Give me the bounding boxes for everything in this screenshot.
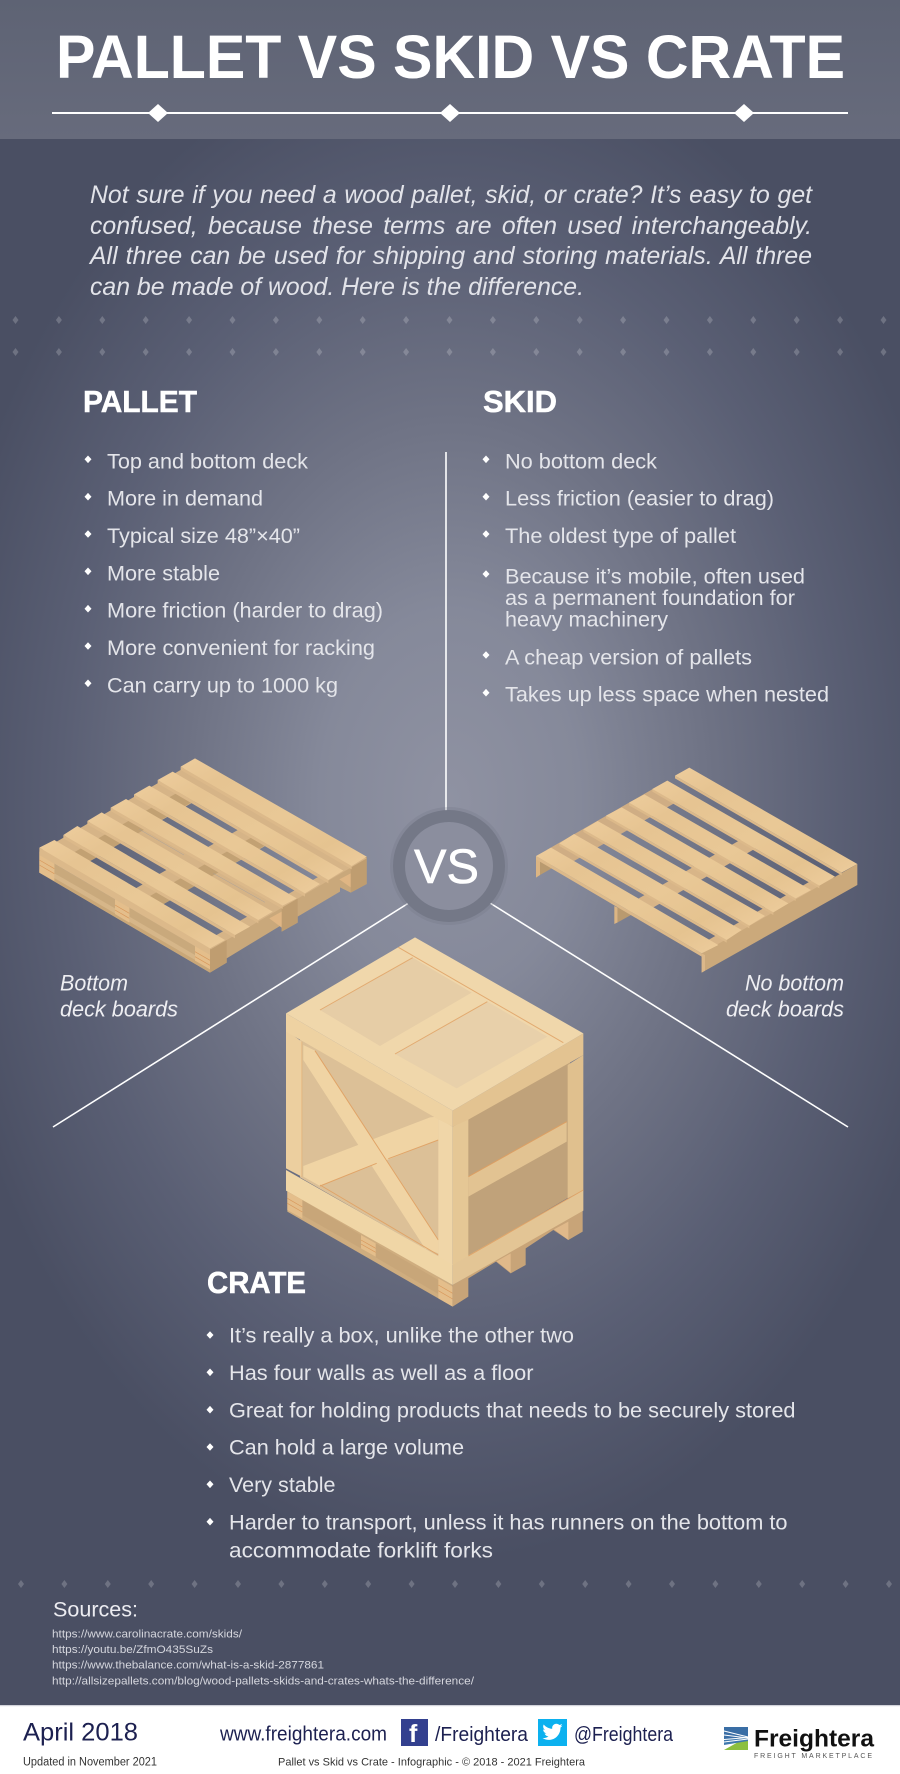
panel: pallet list: [83, 384, 383, 697]
panel: pallet list: Can carry up to 1000 kg: [107, 673, 338, 697]
icon: facebook: f: [409, 1720, 418, 1748]
logo: freightera: FREIGHT MARKETPLACE: [754, 1753, 874, 1760]
vs badge: VS: [414, 841, 479, 894]
panel: skid list: Less friction (easier to drag): [505, 487, 774, 511]
date: April 2018: [23, 1719, 138, 1747]
panel: pallet list: More friction (harder to drag): [107, 599, 383, 623]
footer: Updated in November 2021: [23, 1757, 157, 1769]
panel: pallet list: More in demand: [107, 487, 263, 511]
panel: crate list: [206, 1265, 796, 1562]
panel: pallet list: Top and bottom deck: [107, 449, 308, 473]
intro text: All three can be used for shipping and storing materials. All three: [88, 243, 812, 270]
intro text: Not sure if you need a wood pallet, skid, or crate? It’s easy to get: [90, 182, 813, 209]
caption: bottom deck boards: [60, 971, 178, 1022]
panel: pallet list: More convenient for racking: [107, 636, 375, 660]
panel: skid list: Takes up less space when nested: [505, 683, 829, 707]
caption: no bottom deck boards: No bottom: [745, 971, 844, 996]
footer: /Freightera: [435, 1724, 529, 1746]
footer: @Freightera: [574, 1724, 674, 1746]
caption: no bottom deck boards: [726, 971, 844, 1022]
header band: [0, 0, 900, 139]
sources: https://www.carolinacrate.com/skids/: [52, 1629, 243, 1641]
heading: crate: CRATE: [207, 1265, 306, 1300]
panel: skid list: [482, 384, 829, 707]
footer: [0, 1705, 900, 1774]
panel: crate list: Great for holding products that needs to be securely stored: [229, 1398, 796, 1422]
logo: freightera: [724, 1726, 875, 1760]
panel: crate list: accommodate forklift forks: [229, 1538, 493, 1562]
heading: pallet: PALLET: [83, 384, 197, 419]
caption: bottom deck boards: Bottom: [60, 971, 128, 996]
vs badge: [390, 807, 508, 925]
intro text: [88, 182, 813, 301]
heading: skid: SKID: [483, 384, 557, 419]
icon: facebook: [401, 1719, 428, 1748]
panel: pallet list: More stable: [107, 561, 220, 585]
panel: skid list: The oldest type of pallet: [505, 524, 736, 548]
panel: skid list: as a permanent foundation for: [505, 586, 795, 610]
caption: no bottom deck boards: deck boards: [726, 997, 844, 1022]
intro text: confused, because these terms are often used interchangeably.: [90, 213, 812, 240]
panel: crate list: Has four walls as well as a floor: [229, 1361, 534, 1385]
panel: crate list: Harder to transport, unless it has runners on the bottom to: [229, 1510, 788, 1534]
panel: skid list: heavy machinery: [505, 608, 668, 632]
sources: [52, 1599, 475, 1687]
panel: crate list: It’s really a box, unlike the other two: [229, 1324, 574, 1348]
sources: https://www.thebalance.com/what-is-a-skid-2877861: [52, 1660, 324, 1672]
icon: twitter: [538, 1719, 567, 1746]
sources: Sources:: [53, 1599, 138, 1622]
icon: skid without bottom deck: [536, 768, 857, 973]
title: PALLET VS SKID VS CRATE: [56, 23, 845, 91]
panel: pallet list: Typical size 48”×40”: [107, 524, 300, 548]
sources: http://allsizepallets.com/blog/wood-pallets-skids-and-crates-whats-the-difference/: [52, 1675, 475, 1687]
copyright: Pallet vs Skid vs Crate - Infographic - © 2018 - 2021 Freightera: [278, 1757, 586, 1769]
title divider with diamonds: [52, 104, 848, 122]
panel: crate list: Very stable: [229, 1473, 336, 1497]
sources: https://youtu.be/ZfmO435SuZs: [52, 1644, 214, 1656]
panel: skid list: No bottom deck: [505, 449, 657, 473]
panel: skid list: Because it’s mobile, often used: [505, 564, 805, 588]
dividers: [53, 452, 848, 1127]
caption: bottom deck boards: deck boards: [60, 997, 178, 1022]
website: www.freightera.com: [219, 1724, 387, 1746]
intro text: can be made of wood. Here is the difference.: [90, 274, 584, 301]
icon: crate: [286, 937, 583, 1307]
logo: freightera: Freightera: [754, 1726, 875, 1753]
icon: pallet with bottom deck: [39, 758, 367, 973]
panel: crate list: Can hold a large volume: [229, 1435, 464, 1459]
panel: skid list: A cheap version of pallets: [505, 645, 752, 669]
